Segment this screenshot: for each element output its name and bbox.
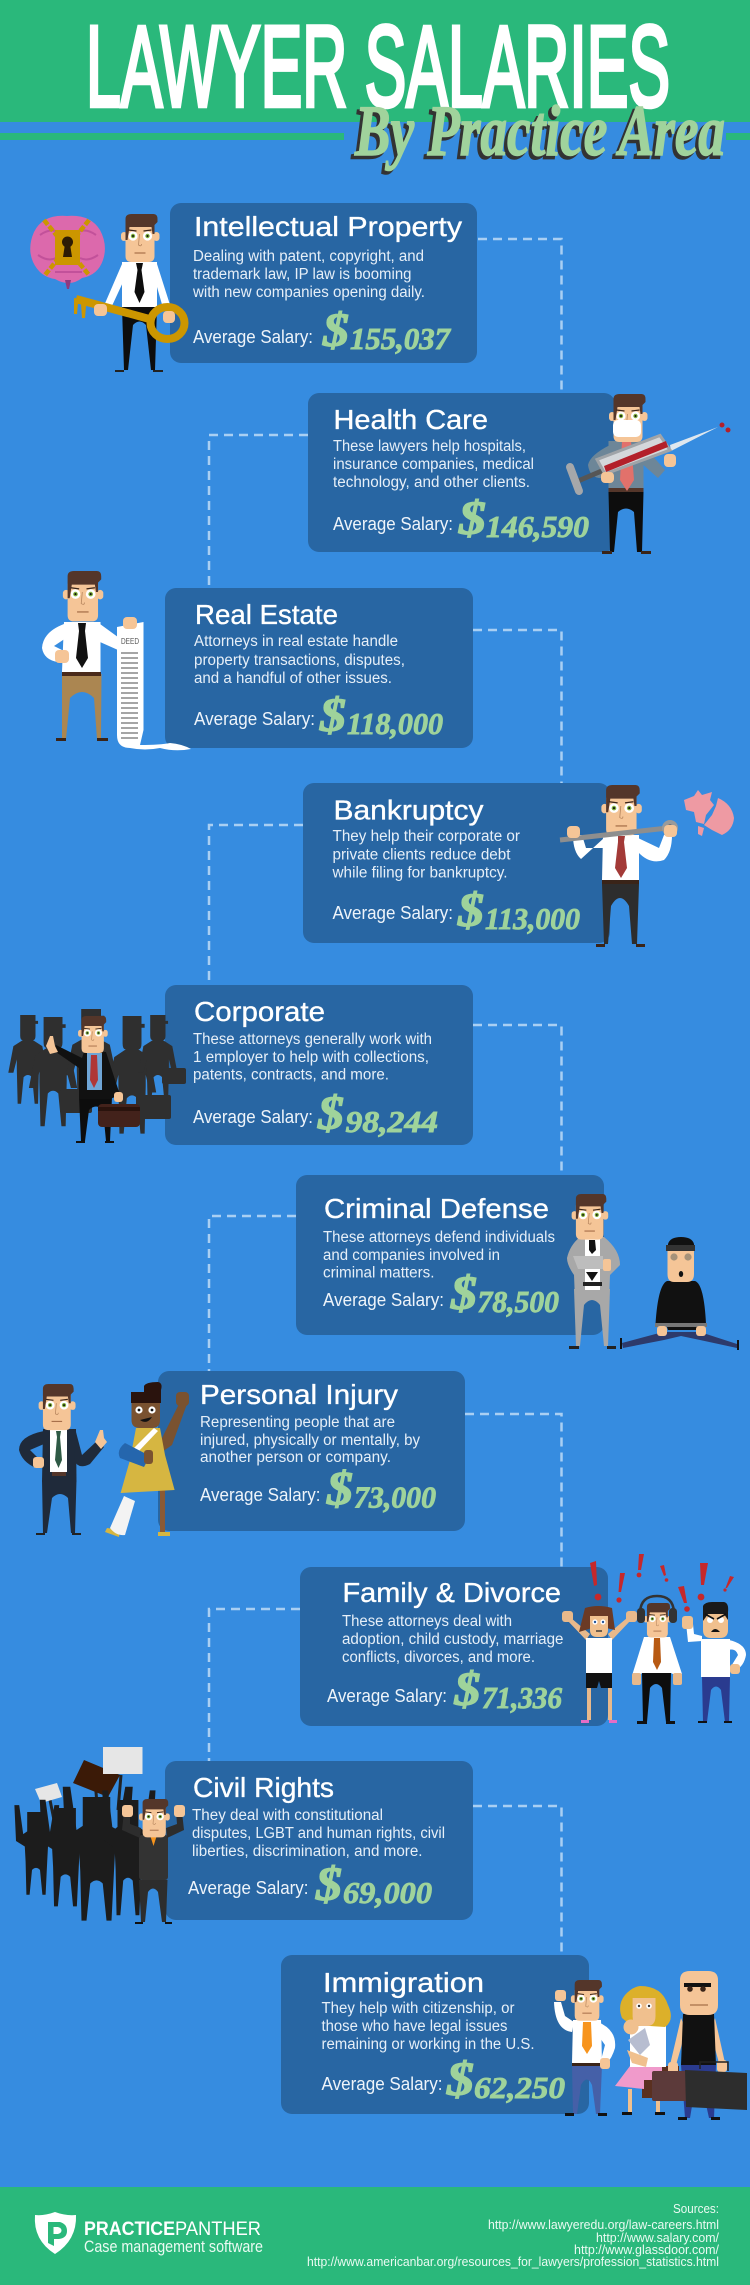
panel background: [303, 783, 610, 943]
heading: Civil Rights: [193, 1772, 334, 1803]
description: while filing for bankruptcy.: [332, 864, 508, 882]
salary value: $: [322, 304, 349, 357]
description: [200, 1414, 420, 1466]
salary label: Average Salary:: [323, 1290, 444, 1310]
sources: Sources:: [673, 2201, 719, 2216]
figure: angry man: [682, 1602, 746, 1723]
salary value: 73,000: [354, 1480, 436, 1514]
heading: Bankruptcy: [334, 794, 484, 826]
panel: Civil Rights: [165, 1761, 473, 1920]
panel background: [165, 985, 473, 1145]
salary value: 62,250: [474, 2070, 565, 2105]
salary label: Average Salary:: [193, 1107, 313, 1127]
figure: health care lawyer with syringe: [570, 394, 730, 554]
figure: criminal defense lawyer: [567, 1194, 620, 1349]
description: [194, 633, 405, 687]
icon: red exclamation marks: [590, 1554, 734, 1612]
heading: Corporate: [194, 996, 325, 1027]
description: trademark law, IP law is booming: [193, 266, 412, 283]
header rule left: [0, 133, 344, 140]
salary value: [457, 884, 580, 937]
logo wordmark: [84, 2219, 263, 2256]
figure: injured woman with cast: [105, 1382, 189, 1537]
logo wordmark: Case management software: [84, 2237, 263, 2256]
description: They deal with constitutional: [192, 1807, 383, 1824]
salary value: 155,037: [350, 321, 451, 356]
description: technology, and other clients.: [333, 474, 530, 491]
figure: civil rights lawyer: [122, 1799, 185, 1924]
salary label: Average Salary:: [332, 903, 453, 923]
description: patents, contracts, and more.: [193, 1066, 389, 1084]
figure: immigration suitcases: [642, 2056, 679, 2098]
description: liberties, discrimination, and more.: [192, 1843, 422, 1860]
panel background: [281, 1955, 589, 2114]
icon: protest signs: [35, 1747, 142, 1840]
description: [342, 1613, 564, 1666]
panel: Real Estate: [165, 588, 473, 748]
salary value: [446, 2053, 565, 2106]
panel: Personal Injury: [158, 1371, 465, 1531]
panel: Health Care: [308, 393, 615, 552]
description: injured, physically or mentally, by: [200, 1432, 420, 1449]
salary value: [317, 1087, 438, 1140]
salary label: Average Salary:: [327, 1686, 447, 1706]
description: another person or company.: [200, 1449, 391, 1466]
description: [332, 828, 520, 882]
description: insurance companies, medical: [333, 456, 534, 473]
salary value: [453, 1663, 562, 1716]
heading: Family & Divorce: [342, 1577, 561, 1608]
salary label: Average Salary:: [194, 709, 315, 729]
figure: real estate lawyer with deed: [42, 571, 191, 750]
heading: Intellectual Property: [194, 211, 462, 242]
salary value: 118,000: [347, 706, 443, 741]
description: 1 employer to help with collections,: [193, 1049, 429, 1066]
salary value: $: [317, 1087, 344, 1140]
salary value: $: [315, 1858, 342, 1911]
description: These attorneys generally work with: [193, 1031, 432, 1048]
icon: shield logo: [35, 2212, 76, 2254]
description: [323, 1229, 555, 1282]
figure: immigrant woman with baby: [615, 1986, 671, 2115]
description: These lawyers help hospitals,: [333, 438, 526, 455]
description: [192, 1807, 445, 1860]
description: with new companies opening daily.: [192, 284, 425, 301]
description: Attorneys in real estate handle: [194, 633, 398, 650]
sources: http://www.americanbar.org/resources_for_lawyers/profession_statistics.html: [307, 2254, 719, 2269]
description: [192, 248, 425, 301]
figure: immigration lawyer: [554, 1980, 615, 2116]
salary value: [326, 1462, 436, 1516]
salary value: [319, 689, 443, 742]
panel background: [170, 203, 477, 363]
salary value: [315, 1858, 432, 1911]
description: [322, 2000, 534, 2053]
heading: Personal Injury: [200, 1379, 398, 1410]
heading: Real Estate: [195, 599, 338, 630]
salary value: [458, 492, 589, 545]
sources: http://www.lawyeredu.org/law-careers.html: [488, 2217, 719, 2232]
figure: bankruptcy lawyer with club: [560, 785, 678, 947]
description: These attorneys defend individuals: [323, 1229, 555, 1246]
salary value: 69,000: [343, 1875, 432, 1910]
figure: corporate crowd silhouettes: [8, 1009, 186, 1134]
description: They help with citizenship, or: [322, 2000, 514, 2017]
sources: http://www.glassdoor.com/: [574, 2242, 719, 2257]
description: those who have legal issues: [322, 2018, 508, 2035]
panel background: [296, 1175, 604, 1335]
salary label: Average Salary:: [322, 2074, 442, 2094]
connector lines: [209, 239, 562, 1955]
salary label: Average Salary:: [333, 514, 453, 534]
logo wordmark: PRACTICE: [84, 2219, 175, 2240]
salary value: [450, 1267, 559, 1320]
description: [333, 438, 534, 491]
icon: broken piggy bank: [684, 790, 734, 836]
figure: intellectual property lawyer with key: [74, 214, 184, 372]
figure: lawyer with headphones: [632, 1596, 682, 1724]
description: Dealing with patent, copyright, and: [193, 248, 424, 265]
description: adoption, child custody, marriage: [342, 1631, 564, 1648]
panel background: [165, 588, 473, 748]
panel background: [300, 1567, 608, 1726]
panel background: [158, 1371, 465, 1531]
header rule right: [726, 133, 750, 140]
salary value: 113,000: [485, 901, 580, 936]
description: conflicts, divorces, and more.: [342, 1649, 535, 1666]
salary value: $: [453, 1663, 480, 1716]
panel background: [165, 1761, 473, 1920]
salary label: Average Salary:: [193, 327, 313, 347]
salary value: $: [458, 492, 486, 545]
salary value: $: [450, 1267, 477, 1320]
salary value: 146,590: [486, 509, 589, 544]
description: remaining or working in the U.S.: [322, 2036, 534, 2053]
icon: locked brain: [30, 216, 105, 289]
figure: personal injury lawyer: [19, 1384, 107, 1535]
sources: http://www.salary.com/: [596, 2230, 719, 2245]
description: They help their corporate or: [332, 828, 520, 845]
heading: Health Care: [334, 404, 488, 435]
salary value: 78,500: [478, 1284, 559, 1319]
figure: big man with luggage: [652, 1971, 747, 2120]
salary label: Average Salary:: [188, 1878, 308, 1898]
figure: protest crowd silhouettes: [14, 1787, 156, 1921]
description: criminal matters.: [323, 1264, 434, 1282]
description: private clients reduce debt: [332, 846, 511, 864]
panel: Family & Divorce: [300, 1567, 608, 1726]
logo wordmark: PANTHER: [175, 2219, 261, 2240]
sources: [307, 2201, 719, 2269]
description: Representing people that are: [200, 1414, 395, 1431]
panel: Immigration: [281, 1955, 589, 2114]
salary value: $: [319, 689, 346, 742]
figure: arguing woman: [562, 1606, 637, 1723]
salary value: 71,336: [482, 1680, 562, 1715]
heading: Criminal Defense: [324, 1193, 549, 1224]
description: property transactions, disputes,: [194, 652, 405, 669]
salary value: $: [457, 884, 484, 937]
salary value: $: [446, 2053, 474, 2106]
salary value: [322, 304, 451, 357]
description: and a handful of other issues.: [194, 670, 392, 687]
panel: Bankruptcy: [303, 783, 610, 943]
salary label: Average Salary:: [200, 1485, 320, 1505]
header band: [0, 0, 750, 122]
description: These attorneys deal with: [342, 1613, 512, 1630]
figure: real estate lawyer with deed: DEED: [121, 637, 139, 646]
footer band: [0, 2187, 750, 2285]
figure: handcuffed criminal: [621, 1237, 738, 1350]
description: disputes, LGBT and human rights, civil: [192, 1825, 445, 1842]
panel: Intellectual Property: [170, 203, 477, 363]
description: [193, 1031, 432, 1084]
salary value: 98,244: [346, 1104, 438, 1139]
panel: Corporate: [165, 985, 473, 1145]
heading: Immigration: [323, 1967, 484, 1998]
figure: corporate lawyer with briefcase: [46, 1016, 140, 1143]
panel background: [308, 393, 615, 552]
panel: Criminal Defense: [296, 1175, 604, 1335]
salary value: $: [326, 1462, 353, 1516]
description: and companies involved in: [323, 1247, 500, 1264]
